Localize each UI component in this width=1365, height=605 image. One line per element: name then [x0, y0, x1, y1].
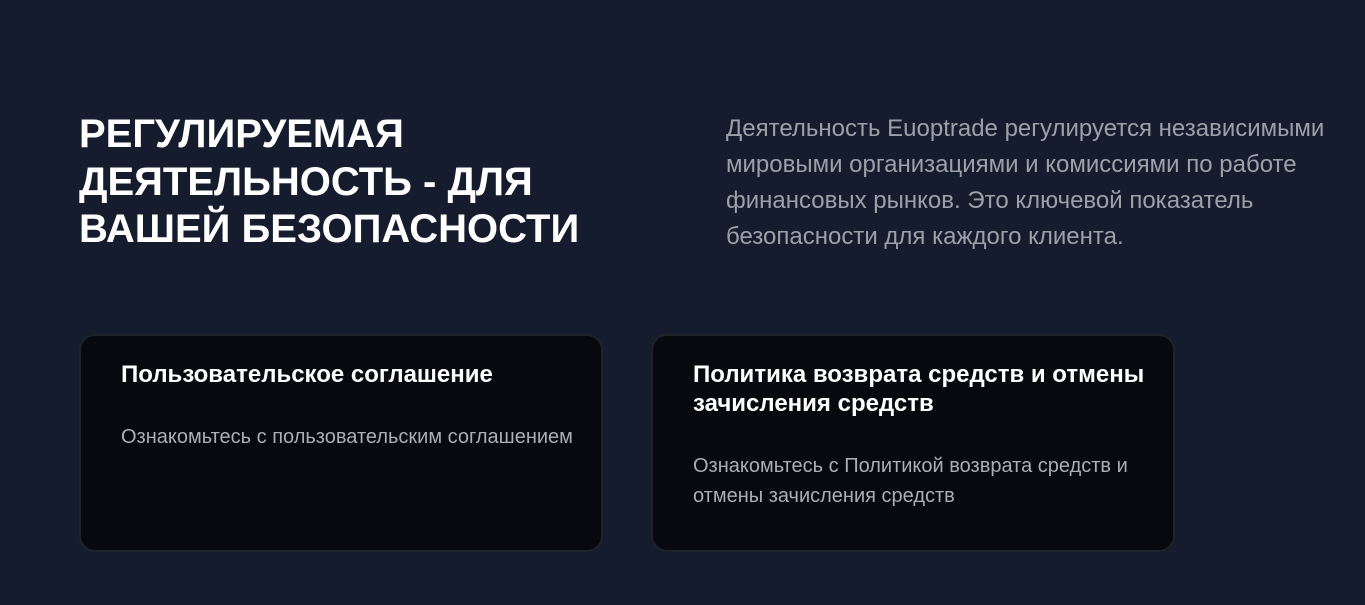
description text — [726, 115, 1324, 250]
card text: refund policy — [693, 455, 1128, 507]
description text: безопасности для каждого клиента. — [726, 223, 1124, 250]
card heading: refund policy: зачисления средств — [693, 390, 934, 417]
card heading: refund policy — [693, 361, 1144, 417]
title — [79, 112, 579, 251]
card text: refund policy: отмены зачисления средств — [693, 485, 955, 507]
card text: refund policy: Ознакомьтесь с Политикой возврата средств и — [693, 455, 1128, 477]
card text: user agreement: Ознакомьтесь с пользовательским соглашением — [121, 426, 573, 448]
description text: мировыми организациями и комиссиями по работе — [726, 151, 1297, 178]
card heading: user agreement: Пользовательское соглашение — [121, 361, 493, 388]
card heading: refund policy: Политика возврата средств и отмены — [693, 361, 1144, 388]
title: РЕГУЛИРУЕМАЯ — [79, 112, 404, 156]
title: ВАШЕЙ БЕЗОПАСНОСТИ — [79, 207, 579, 251]
description text: финансовых рынков. Это ключевой показатель — [726, 187, 1253, 214]
description text: Деятельность Euoptrade регулируется независимыми — [726, 115, 1324, 142]
title: ДЕЯТЕЛЬНОСТЬ - ДЛЯ — [79, 160, 533, 204]
panel: user agreement — [79, 334, 603, 552]
panel: refund policy — [651, 334, 1175, 552]
